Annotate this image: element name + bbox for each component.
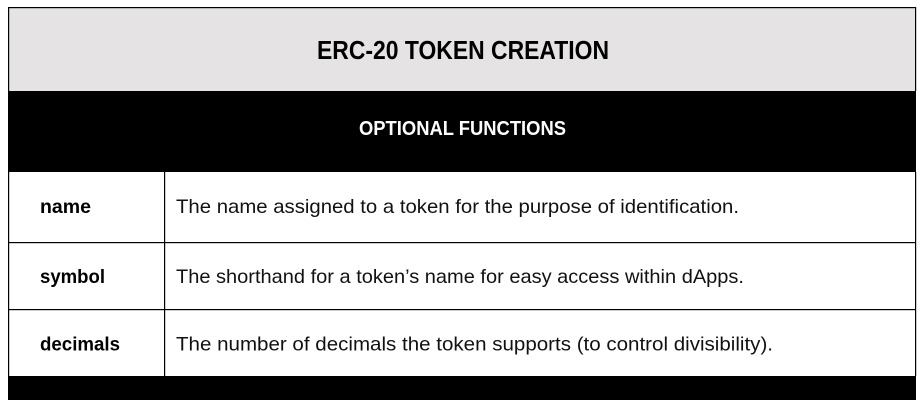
row: symbol: symbol xyxy=(40,266,105,288)
panel: title band xyxy=(8,7,916,91)
title: ERC-20 TOKEN CREATION xyxy=(317,37,609,65)
heading: optional functions: OPTIONAL FUNCTIONS xyxy=(359,117,566,140)
footer band xyxy=(8,376,916,400)
row: name: name xyxy=(40,196,91,218)
panel: optional functions header xyxy=(8,91,916,172)
row: decimals: decimals xyxy=(40,334,120,356)
row: decimals: The number of decimals the token supports (to control divisibility). xyxy=(176,334,773,356)
row: name: The name assigned to a token for the purpose of identification. xyxy=(176,196,739,218)
panel: function rows xyxy=(8,172,916,376)
row: symbol: The shorthand for a token’s name for easy access within dApps. xyxy=(176,266,744,288)
